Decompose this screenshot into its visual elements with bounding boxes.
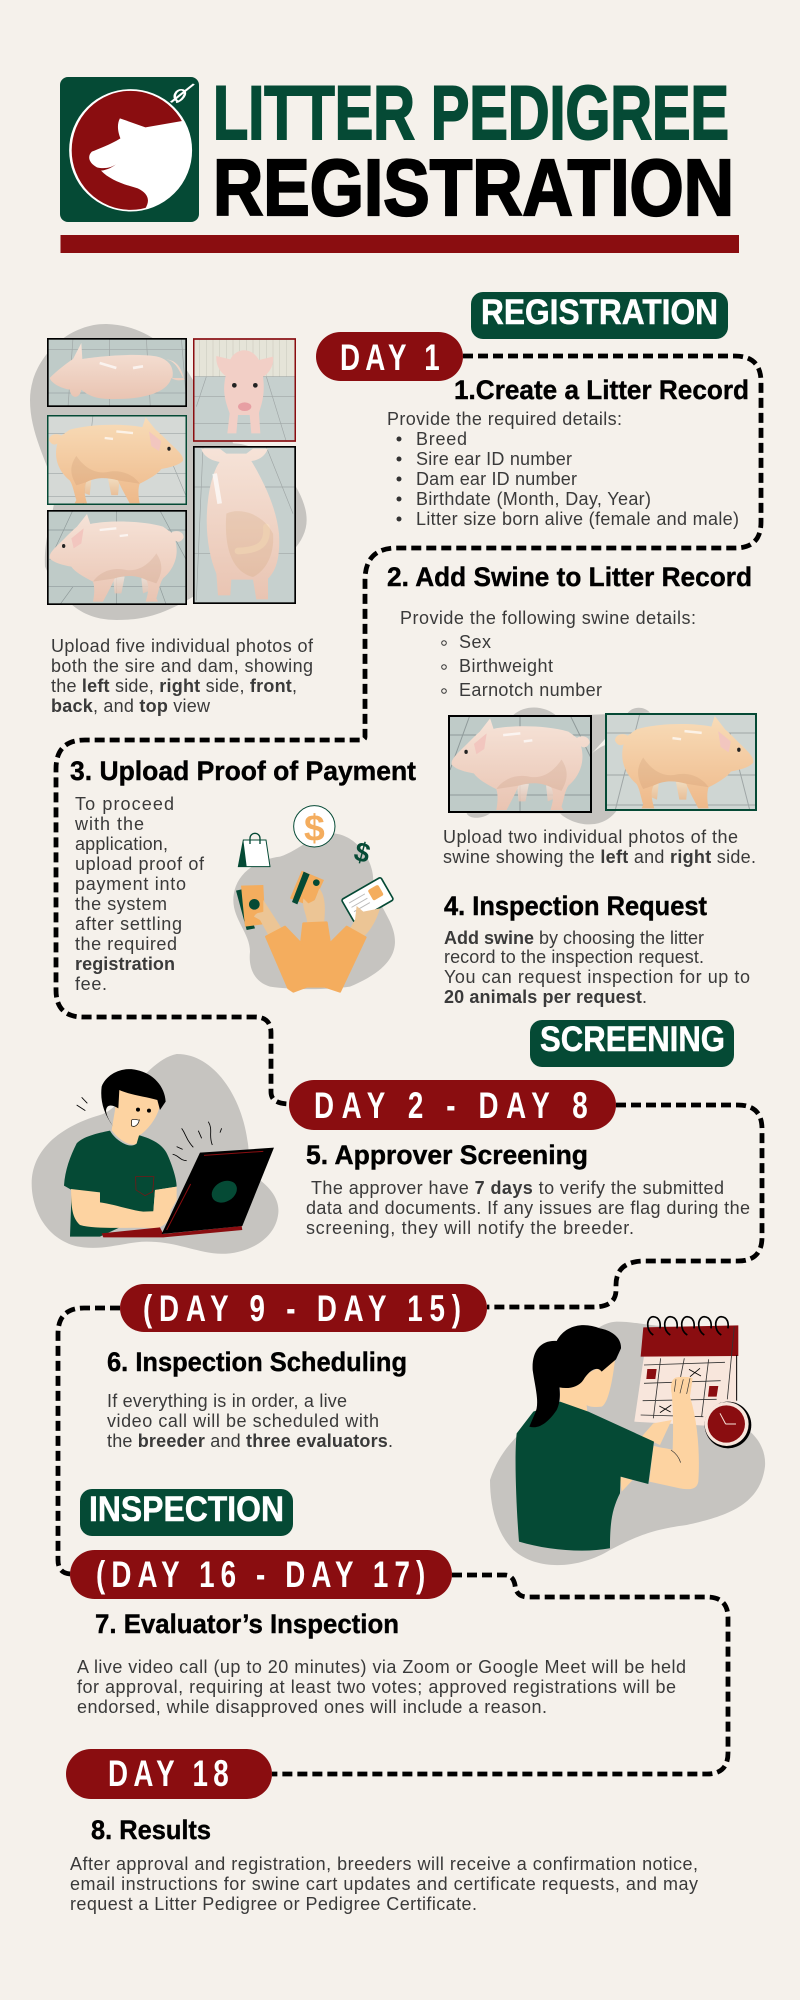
heading 3: 3. Upload Proof of Payment: [70, 756, 416, 786]
pill: day 18: DAY 18: [108, 1752, 229, 1794]
text 3: upload proof of: [75, 854, 205, 874]
photo: left side: [47, 510, 187, 605]
list 1: Breed: [416, 429, 467, 449]
list 2: [400, 608, 696, 700]
heading 5: 5. Approver Screening: [306, 1140, 588, 1170]
text 7: [77, 1657, 686, 1717]
title: [213, 71, 734, 232]
photo: top view: [47, 338, 187, 407]
pill: day 1: DAY 1: [340, 336, 440, 378]
list 1: Dam ear ID number: [416, 469, 577, 489]
text 7: A live video call (up to 20 minutes) via Zoom or Google Meet will be held: [77, 1657, 686, 1677]
text 4: You can request inspection for up to: [444, 967, 750, 987]
text 7: for approval, requiring at least two votes; approved registrations will be: [77, 1677, 676, 1697]
hair: [529, 1325, 621, 1427]
text 3: [74, 794, 205, 994]
text 4: [444, 928, 750, 1007]
text 6: If everything is in order, a live: [107, 1391, 347, 1411]
text: upload five photos: both the sire and dam, showing: [51, 656, 313, 676]
step 7: evaluator's inspection: [77, 1609, 686, 1717]
arms: [620, 1377, 699, 1492]
text 3: application,: [75, 834, 168, 854]
step 6: inspection scheduling: [107, 1347, 407, 1451]
list 1: Provide the required details:: [387, 409, 622, 429]
illustration: woman and calendar: [490, 1317, 765, 1565]
calendar: [634, 1317, 738, 1427]
heading 6: 6. Inspection Scheduling: [107, 1347, 407, 1377]
shirt: [64, 1131, 177, 1237]
motion marks: [77, 1097, 222, 1161]
text 8: email instructions for swine cart updates and certificate requests, and may: [70, 1874, 698, 1894]
card: [290, 871, 324, 907]
pill: day 18: [66, 1749, 272, 1799]
text: upload five photos: the left side, right side, front,: [51, 676, 297, 696]
heading 7: 7. Evaluator’s Inspection: [95, 1609, 399, 1639]
sleeves: [266, 922, 366, 992]
laptop: [102, 1148, 274, 1237]
head: [112, 1087, 160, 1145]
cash: [236, 885, 265, 930]
photo: front view: [193, 338, 296, 442]
text 4: Add swine by choosing the litter: [444, 928, 704, 948]
phone: [341, 877, 394, 922]
photo: right side: [47, 415, 187, 505]
text 4: 20 animals per request.: [444, 987, 647, 1007]
step 5: approver screening: [306, 1140, 750, 1238]
step 8: results: [70, 1815, 698, 1914]
photo: swine right: [605, 713, 757, 811]
pill: day 1: [316, 332, 463, 381]
title bar: [60, 235, 739, 253]
caption: swine photos: swine showing the left and right side.: [443, 847, 756, 867]
hands: [254, 888, 380, 937]
pill: inspection: INSPECTION: [89, 1490, 284, 1529]
text 5: [306, 1178, 750, 1238]
heading 4: 4. Inspection Request: [444, 891, 707, 921]
list 1: Litter size born alive (female and male): [416, 509, 739, 529]
text: upload five photos: [51, 636, 314, 716]
text 8: After approval and registration, breeders will receive a confirmation notice,: [70, 1854, 698, 1874]
text 3: To proceed: [75, 794, 174, 814]
text 6: video call will be scheduled with: [107, 1411, 379, 1431]
caption: swine photos: [443, 827, 756, 867]
shirt: [516, 1402, 654, 1551]
illustration: man at laptop: [32, 1054, 278, 1254]
caption: swine photos: Upload two individual photos of the: [443, 827, 738, 847]
heading 8: 8. Results: [91, 1815, 211, 1845]
step 3: proof of payment: [70, 756, 416, 994]
bag: [238, 833, 270, 867]
text 3: registration: [75, 954, 175, 974]
header: [60, 71, 739, 253]
dashed timeline: [56, 356, 762, 1774]
title: REGISTRATION: [213, 143, 734, 232]
text 3: after settling: [75, 914, 182, 934]
pill: day 9 to day 15: (DAY 9 - DAY 15): [143, 1287, 461, 1329]
text 3: with the: [74, 814, 144, 834]
pill: screening: SCREENING: [540, 1020, 725, 1059]
illustration: payment hands: [233, 806, 395, 992]
head: [560, 1360, 615, 1412]
text 3: payment into: [75, 874, 186, 894]
list 2: Earnotch number: [459, 680, 602, 700]
text 6: [107, 1391, 393, 1451]
list 2: Birthweight: [459, 656, 553, 676]
step 2: add swine: [387, 562, 757, 867]
list 1: Sire ear ID number: [416, 449, 572, 469]
dollar sign: $: [351, 835, 374, 869]
text: upload five photos: back, and top view: [51, 696, 211, 716]
text 4: record to the inspection request.: [444, 947, 704, 967]
text 6: the breeder and three evaluators.: [107, 1431, 393, 1451]
step 1: create a litter record: [387, 375, 749, 529]
heading 2: 2. Add Swine to Litter Record: [387, 562, 752, 592]
text 3: the required: [75, 934, 177, 954]
face: [132, 1108, 151, 1126]
pill: registration: REGISTRATION: [481, 293, 718, 332]
list 2: Sex: [459, 632, 491, 652]
text: upload five photos: Upload five individual photos of: [51, 636, 314, 656]
pill: day 2 to day 8: DAY 2 - DAY 8: [314, 1084, 588, 1126]
step 4: inspection request: [444, 891, 750, 1007]
text 5: data and documents. If any issues are flag during the: [306, 1198, 750, 1218]
pill: day 16 to day 17: (DAY 16 - DAY 17): [96, 1553, 425, 1595]
text 7: endorsed, while disapproved ones will include a reason.: [77, 1697, 547, 1717]
list 1: Birthdate (Month, Day, Year): [416, 489, 651, 509]
text 3: fee.: [75, 974, 107, 994]
hair: [101, 1069, 166, 1127]
coin: $: [304, 807, 325, 849]
coin: [294, 806, 335, 849]
photo: swine left: [448, 715, 592, 813]
photo: back view: [193, 446, 296, 604]
text 5: The approver have 7 days to verify the submitted: [311, 1178, 724, 1198]
text 8: request a Litter Pedigree or Pedigree Certificate.: [70, 1894, 477, 1914]
text 3: the system: [75, 894, 167, 914]
arms: [71, 1187, 177, 1228]
clock: [705, 1402, 751, 1448]
text 8: [70, 1854, 698, 1914]
blob: photo backdrop: [30, 324, 307, 620]
list 2: Provide the following swine details:: [400, 608, 696, 628]
logo: [60, 77, 204, 222]
list 1: [387, 409, 739, 529]
photos: sire and dam: [47, 338, 296, 605]
swine photos: [448, 708, 757, 824]
heading 1: 1.Create a Litter Record: [454, 375, 749, 405]
pocket: [136, 1177, 154, 1196]
text 5: screening, they will notify the breeder.: [306, 1218, 634, 1238]
